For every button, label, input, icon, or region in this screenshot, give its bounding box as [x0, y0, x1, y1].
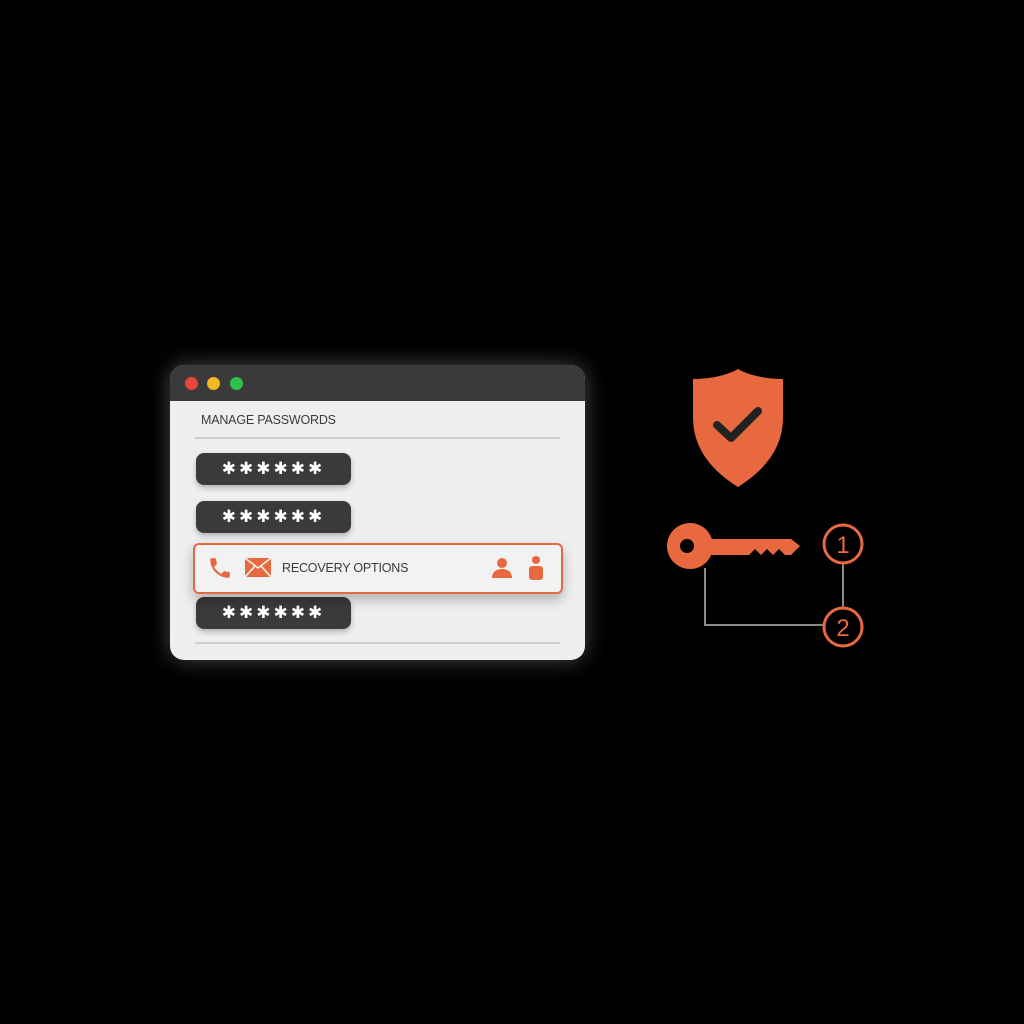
icon: shield with check — [693, 369, 783, 487]
icon: user 2 — [529, 556, 543, 580]
step 1: 1 — [836, 532, 850, 559]
icon: key — [667, 523, 800, 569]
step 2: 2 — [836, 615, 850, 642]
step 1 — [824, 525, 862, 563]
icon: user — [492, 558, 512, 578]
step 2 — [824, 608, 862, 646]
password field 2: ✱✱✱✱✱✱ — [222, 507, 325, 527]
panel: recovery options — [193, 543, 563, 594]
password field 1 — [196, 453, 351, 485]
password field 1: ✱✱✱✱✱✱ — [222, 459, 325, 479]
password field 3 — [196, 597, 351, 629]
password field 3: ✱✱✱✱✱✱ — [222, 603, 325, 623]
panel: browser window — [170, 365, 585, 660]
icon: phone — [210, 558, 230, 578]
icon: envelope — [245, 558, 271, 577]
text: recovery options: RECOVERY OPTIONS — [282, 561, 408, 575]
title bar — [170, 365, 585, 401]
diagram: key with two steps — [667, 523, 864, 648]
heading: manage passwords: MANAGE PASSWORDS — [201, 413, 336, 427]
password field 2 — [196, 501, 351, 533]
